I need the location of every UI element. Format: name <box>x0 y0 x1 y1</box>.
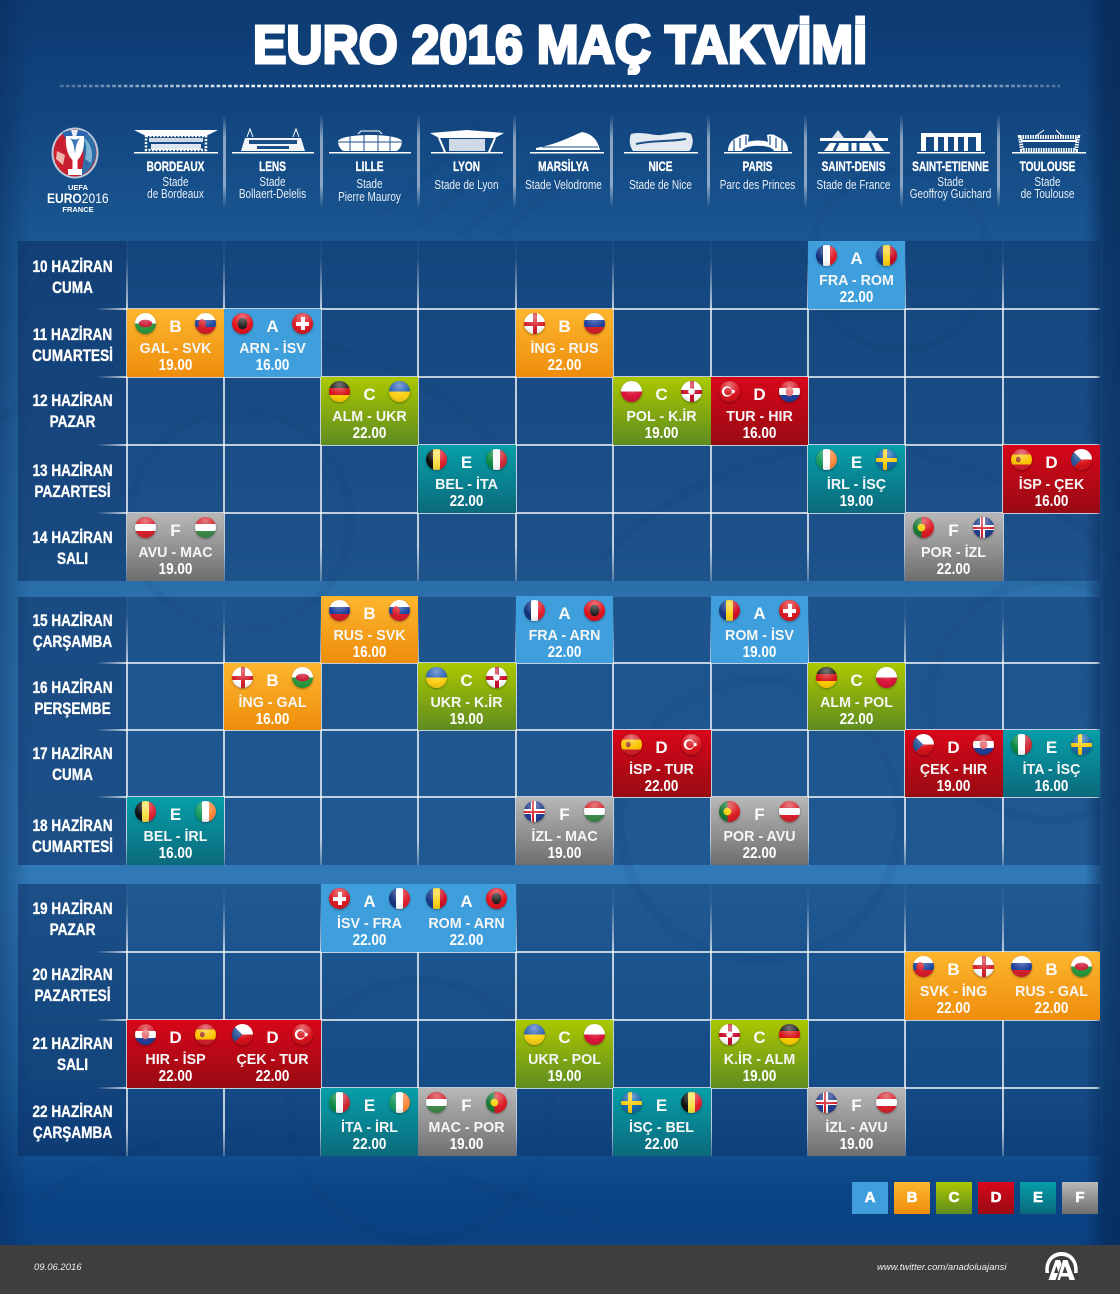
match: GAL-SVK: GAL - SVK <box>140 340 211 357</box>
venue: Toulouse: Stade <box>1034 175 1061 189</box>
match: ROM-ISV <box>711 596 808 663</box>
match: FRA-ARN <box>516 596 613 663</box>
match: ALM-POL <box>808 663 905 730</box>
match: HIR-ISP: HIR - İSP <box>145 1051 206 1068</box>
match: CEK-HIR <box>905 730 1003 797</box>
legend item C <box>936 1182 972 1214</box>
logo: UEFA Euro 2016 France <box>47 128 109 214</box>
match: ITA-ISC: E <box>1046 738 1057 757</box>
date: 14 June: 14 HAZİRAN <box>32 528 113 547</box>
date text: 09.06.2016 <box>34 1262 82 1273</box>
date: 22 June: ÇARŞAMBA <box>33 1122 112 1142</box>
icon: Saint-Etienne stadium <box>917 133 985 154</box>
match: ROM-ISV: A <box>753 604 766 623</box>
match: ING-RUS: B <box>558 317 571 336</box>
venue: Saint-Etienne: Geoffroy Guichard <box>910 186 991 200</box>
icon: Toulouse stadium <box>1012 130 1086 154</box>
match: ISP-CEK: 16.00 <box>1035 493 1068 510</box>
legend item B: B <box>907 1189 917 1206</box>
match: AVU-MAC <box>127 513 224 581</box>
date: 13 June: PAZARTESİ <box>34 482 111 500</box>
match: CEK-TUR: 22.00 <box>256 1068 289 1085</box>
match: ISC-BEL: İSÇ - BEL <box>629 1119 694 1136</box>
venue: Saint-Etienne: SAINT-ETIENNE <box>912 158 989 174</box>
legend item D <box>978 1182 1014 1214</box>
match: ISP-TUR: 22.00 <box>645 778 678 795</box>
date: 14 June: SALI <box>57 548 88 568</box>
icon: Paris stadium <box>724 134 792 154</box>
date: 20 June <box>32 965 113 1004</box>
date: 20 June: PAZARTESİ <box>34 986 111 1004</box>
venue: Lille: Pierre Mauroy <box>338 190 401 204</box>
icon: Bordeaux stadium <box>134 130 218 154</box>
match: IRL-ISC: 19.00 <box>840 493 873 510</box>
match: ROM-ARN: ROM - ARN <box>428 915 505 932</box>
legend item D: D <box>991 1189 1001 1206</box>
match: MAC-POR: 19.00 <box>450 1136 483 1153</box>
match: BEL-ITA: BEL - İTA <box>435 476 498 493</box>
icon: Saint-Denis stadium <box>818 130 890 154</box>
match: CEK-HIR: ÇEK - HIR <box>920 761 987 778</box>
match: TUR-HIR: TUR - HIR <box>726 408 793 425</box>
match: TUR-HIR: 16.00 <box>743 425 776 442</box>
match: ISV-FRA: A <box>363 892 376 911</box>
match: ING-GAL <box>224 663 321 730</box>
match: POR-IZL: F <box>948 521 959 540</box>
match: IZL-AVU <box>808 1088 905 1156</box>
match: ITA-IRL: İTA - İRL <box>341 1119 398 1136</box>
match: AVU-MAC: F <box>170 521 181 540</box>
match: UKR-POL <box>516 1020 613 1088</box>
match: SVK-ING: 22.00 <box>937 1000 970 1017</box>
match: FRA-ARN: A <box>558 604 571 623</box>
match: MAC-POR: F <box>461 1096 472 1115</box>
match: ING-RUS: İNG - RUS <box>530 340 599 357</box>
icon: Lens stadium <box>232 128 314 154</box>
match: FRA-ROM: 22.00 <box>840 289 873 306</box>
match: HIR-ISP <box>127 1020 224 1088</box>
match: ALM-UKR: ALM - UKR <box>332 408 407 425</box>
venue: Saint-Etienne: Stade <box>937 175 964 189</box>
match: POL-KIR: POL - K.İR <box>626 408 697 425</box>
match: BEL-IRL: 16.00 <box>159 845 192 862</box>
match: GAL-SVK: B <box>169 317 182 336</box>
match: KIR-ALM: K.İR - ALM <box>724 1051 795 1068</box>
footer bar <box>0 1245 1120 1294</box>
venue: Paris: PARIS <box>742 158 773 174</box>
legend item C: C <box>949 1189 959 1206</box>
match: CEK-TUR: D <box>266 1028 279 1047</box>
venue: Lyon: LYON <box>453 158 480 174</box>
match: KIR-ALM <box>711 1020 808 1088</box>
match: IZL-MAC: F <box>559 805 570 824</box>
venue: Marsilya <box>525 132 604 192</box>
match: CEK-TUR <box>224 1020 321 1088</box>
date: 21 June: SALI <box>57 1054 88 1074</box>
date: 11 June: CUMARTESİ <box>32 346 113 364</box>
date: 18 June <box>32 816 113 856</box>
panel: week 2 schedule, 15-18 June <box>18 597 1100 865</box>
venue: Toulouse <box>1012 130 1086 200</box>
match: ROM-ISV: ROM - İSV <box>725 627 794 644</box>
match: UKR-KIR: UKR - K.İR <box>430 694 503 711</box>
match: ING-GAL: İNG - GAL <box>238 694 307 711</box>
venue: Bordeaux: de Bordeaux <box>147 186 204 200</box>
match: UKR-KIR <box>418 663 516 730</box>
panel: week 3 schedule, 19-22 June <box>18 884 1100 1156</box>
match: FRA-ROM <box>808 241 905 309</box>
match: IZL-AVU: 19.00 <box>840 1136 873 1153</box>
date: 17 June: 17 HAZİRAN <box>32 744 113 763</box>
venue: Lens: Stade <box>259 175 286 189</box>
legend item F: F <box>1075 1189 1085 1206</box>
match: RUS-GAL: B <box>1045 960 1058 979</box>
date: 10 June: CUMA <box>52 278 93 296</box>
date: 13 June <box>32 461 113 500</box>
match: BEL-IRL: E <box>170 805 181 824</box>
venue: Saint-Denis: Stade de France <box>817 178 890 192</box>
venue: Marsilya: MARSİLYA <box>538 158 589 174</box>
match: ISP-TUR: D <box>655 738 668 757</box>
legend item F <box>1062 1182 1098 1214</box>
match: POR-AVU: 22.00 <box>743 845 776 862</box>
icon: Lyon stadium <box>430 130 504 154</box>
match: ARN-ISV: A <box>266 317 279 336</box>
match: ARN-ISV <box>224 309 321 377</box>
venue: Nice: NICE <box>648 158 673 174</box>
date: 16 June: PERŞEMBE <box>34 698 111 718</box>
match: GAL-SVK: 19.00 <box>159 357 192 374</box>
match: FRA-ARN: 22.00 <box>548 644 581 661</box>
match: POL-KIR: 19.00 <box>645 425 678 442</box>
venue: Lyon: Stade de Lyon <box>434 178 499 192</box>
match: RUS-GAL: RUS - GAL <box>1015 983 1088 1000</box>
match: ARN-ISV: 16.00 <box>256 357 289 374</box>
logo wordmark: UEFA <box>68 183 88 192</box>
match: ISV-FRA <box>321 884 418 952</box>
venue: Bordeaux <box>134 130 218 200</box>
match: IZL-MAC: 19.00 <box>548 845 581 862</box>
match: ITA-IRL: E <box>364 1096 375 1115</box>
date: 12 June: PAZAR <box>50 412 95 430</box>
match: UKR-POL: UKR - POL <box>528 1051 601 1068</box>
match: ISC-BEL: 22.00 <box>645 1136 678 1153</box>
date: 22 June: 22 HAZİRAN <box>32 1102 113 1121</box>
venue: Toulouse: de Toulouse <box>1021 186 1074 200</box>
panel: week 1 schedule, 10-14 June <box>18 241 1100 581</box>
match: ISC-BEL <box>613 1088 711 1156</box>
venue: Lens: LENS <box>259 158 286 174</box>
date: 20 June: 20 HAZİRAN <box>32 965 113 984</box>
match: HIR-ISP: D <box>169 1028 182 1047</box>
legend: groups <box>852 1182 1098 1214</box>
match: SVK-ING: SVK - İNG <box>920 983 987 1000</box>
match: IZL-AVU: F <box>851 1096 862 1115</box>
match: ISP-TUR <box>613 730 711 797</box>
legend item A: A <box>865 1189 875 1206</box>
date: 15 June: 15 HAZİRAN <box>32 611 113 630</box>
venue: Paris <box>720 134 795 192</box>
match: ITA-ISC <box>1003 730 1100 797</box>
match: HIR-ISP: 22.00 <box>159 1068 192 1085</box>
venue: Saint-Denis: SAINT-DENIS <box>822 158 885 174</box>
match: ALM-UKR: 22.00 <box>353 425 386 442</box>
match: ROM-ARN: 22.00 <box>450 932 483 949</box>
match: MAC-POR <box>418 1088 516 1156</box>
match: MAC-POR: MAC - POR <box>428 1119 504 1136</box>
date: 18 June: CUMARTESİ <box>32 836 113 856</box>
venue: Lens <box>232 128 314 200</box>
venue: Nice <box>624 132 698 192</box>
date: 11 June: 11 HAZİRAN <box>33 325 112 344</box>
match: BEL-IRL <box>127 797 224 865</box>
match: IZL-AVU: İZL - AVU <box>825 1119 888 1136</box>
match: CEK-TUR: ÇEK - TUR <box>236 1051 309 1068</box>
match: BEL-ITA: 22.00 <box>450 493 483 510</box>
date: 22 June <box>32 1102 113 1142</box>
venue: Saint-Etienne <box>910 133 991 200</box>
match: SVK-ING <box>905 952 1003 1020</box>
match: ING-GAL: 16.00 <box>256 711 289 728</box>
icon: Marsilya stadium <box>530 132 604 154</box>
match: ISV-FRA: 22.00 <box>353 932 386 949</box>
match: SVK-ING: B <box>947 960 960 979</box>
venue: Lyon <box>430 130 504 192</box>
match: KIR-ALM: 19.00 <box>743 1068 776 1085</box>
logo wordmark: FRANCE <box>62 205 94 214</box>
match: IRL-ISC: İRL - İSÇ <box>827 476 886 493</box>
match: BEL-ITA: E <box>461 453 472 472</box>
match: AVU-MAC: 19.00 <box>159 561 192 578</box>
match: IZL-MAC: İZL - MAC <box>531 828 598 845</box>
icon: Nice stadium <box>624 132 698 154</box>
venue: Bordeaux: BORDEAUX <box>147 158 204 174</box>
match: CEK-HIR: D <box>947 738 960 757</box>
logo wordmark <box>47 183 109 214</box>
twitter url: www.twitter.com/anadoluajansi <box>877 1262 1007 1273</box>
logo wordmark: EURO2016 <box>47 190 109 206</box>
match: ING-RUS <box>516 309 613 377</box>
match: RUS-SVK: B <box>363 604 376 623</box>
date: 21 June <box>32 1034 113 1074</box>
match: FRA-ARN: FRA - ARN <box>529 627 600 644</box>
match: ALM-POL: C <box>850 671 863 690</box>
match: RUS-SVK: RUS - SVK <box>333 627 406 644</box>
venue: Lille: LILLE <box>355 158 383 174</box>
match: UKR-KIR: C <box>460 671 473 690</box>
match: ISP-CEK <box>1003 445 1100 513</box>
match: TUR-HIR: D <box>753 385 766 404</box>
date: 15 June <box>32 611 113 651</box>
venue: Lens: Bollaert-Delelis <box>239 186 306 200</box>
match: AVU-MAC: AVU - MAC <box>138 544 213 561</box>
column separators <box>223 116 1000 206</box>
date: 19 June: PAZAR <box>50 920 95 938</box>
match: UKR-POL: 19.00 <box>548 1068 581 1085</box>
date: 17 June <box>32 744 113 784</box>
match: POR-IZL <box>905 513 1003 581</box>
match: ISP-TUR: İSP - TUR <box>629 761 694 778</box>
match: POR-AVU: POR - AVU <box>723 828 796 845</box>
match: BEL-IRL: BEL - İRL <box>144 828 207 845</box>
date: 21 June: 21 HAZİRAN <box>32 1034 113 1053</box>
match: POR-AVU: F <box>754 805 765 824</box>
logo emblem <box>52 128 98 178</box>
date: 19 June: 19 HAZİRAN <box>32 899 113 918</box>
match: ALM-POL: 22.00 <box>840 711 873 728</box>
match: ALM-POL: ALM - POL <box>820 694 893 711</box>
match: ISC-BEL: E <box>656 1096 667 1115</box>
match: UKR-KIR: 19.00 <box>450 711 483 728</box>
match: GAL-SVK <box>127 309 224 377</box>
match: ITA-IRL <box>321 1088 418 1156</box>
match: IRL-ISC: E <box>851 453 862 472</box>
date: 10 June <box>32 257 113 296</box>
match: ALM-UKR <box>321 377 418 445</box>
match: ALM-UKR: C <box>363 385 376 404</box>
date: 16 June: 16 HAZİRAN <box>32 678 113 697</box>
match: RUS-GAL <box>1003 952 1100 1020</box>
date: 16 June <box>32 678 113 718</box>
date: 13 June: 13 HAZİRAN <box>32 461 113 480</box>
date: 10 June: 10 HAZİRAN <box>32 257 113 276</box>
venue: Lille: Stade <box>356 177 383 191</box>
venue: Nice: Stade de Nice <box>629 178 692 192</box>
match: ISP-CEK: D <box>1045 453 1058 472</box>
match: FRA-ROM: A <box>850 249 863 268</box>
match: IZL-MAC <box>516 797 613 865</box>
venue: Saint-Denis <box>817 130 890 192</box>
match: ITA-ISC: İTA - İSÇ <box>1023 761 1080 778</box>
match: ING-RUS: 22.00 <box>548 357 581 374</box>
match: POR-IZL: 22.00 <box>937 561 970 578</box>
match: ITA-IRL: 22.00 <box>353 1136 386 1153</box>
match: UKR-POL: C <box>558 1028 571 1047</box>
venue: Lille <box>329 130 411 204</box>
match: ISV-FRA: İSV - FRA <box>337 915 402 932</box>
match: ITA-ISC: 16.00 <box>1035 778 1068 795</box>
icon: Lille stadium <box>329 130 411 154</box>
date: 12 June <box>32 391 113 430</box>
match: CEK-HIR: 19.00 <box>937 778 970 795</box>
date: 14 June <box>32 528 113 568</box>
match: KIR-ALM: C <box>753 1028 766 1047</box>
match: ROM-ARN: A <box>460 892 473 911</box>
match: RUS-GAL: 22.00 <box>1035 1000 1068 1017</box>
match: POR-AVU <box>711 797 808 865</box>
title divider <box>60 84 1060 88</box>
match: ROM-ISV: 19.00 <box>743 644 776 661</box>
legend item E <box>1020 1182 1056 1214</box>
match: POL-KIR: C <box>655 385 668 404</box>
date: 17 June: CUMA <box>52 764 93 784</box>
match: ISP-CEK: İSP - ÇEK <box>1019 476 1084 493</box>
venue: Toulouse: TOULOUSE <box>1020 158 1075 174</box>
match: IRL-ISC <box>808 445 905 513</box>
icon: Anadolu Agency logo <box>1044 1251 1079 1281</box>
match: ARN-ISV: ARN - İSV <box>239 340 306 357</box>
match: TUR-HIR <box>711 377 808 445</box>
match: ROM-ARN <box>418 884 516 952</box>
date: 12 June: 12 HAZİRAN <box>32 391 113 410</box>
match: FRA-ROM: FRA - ROM <box>819 272 894 289</box>
match: BEL-ITA <box>418 445 516 513</box>
match: RUS-SVK: 16.00 <box>353 644 386 661</box>
legend item A <box>852 1182 888 1214</box>
match: ING-GAL: B <box>266 671 279 690</box>
date: 11 June <box>32 325 113 364</box>
venue: Paris: Parc des Princes <box>720 178 795 192</box>
legend item B <box>894 1182 930 1214</box>
match: POL-KIR <box>613 377 711 445</box>
venue: Bordeaux: Stade <box>162 175 189 189</box>
match: RUS-SVK <box>321 596 418 663</box>
match: POR-IZL: POR - İZL <box>921 544 986 561</box>
legend item E: E <box>1033 1189 1043 1206</box>
venue: Marsilya: Stade Velodrome <box>525 178 602 192</box>
date: 15 June: ÇARŞAMBA <box>33 632 112 650</box>
date: 18 June: 18 HAZİRAN <box>32 816 113 835</box>
date: 19 June <box>32 899 113 938</box>
